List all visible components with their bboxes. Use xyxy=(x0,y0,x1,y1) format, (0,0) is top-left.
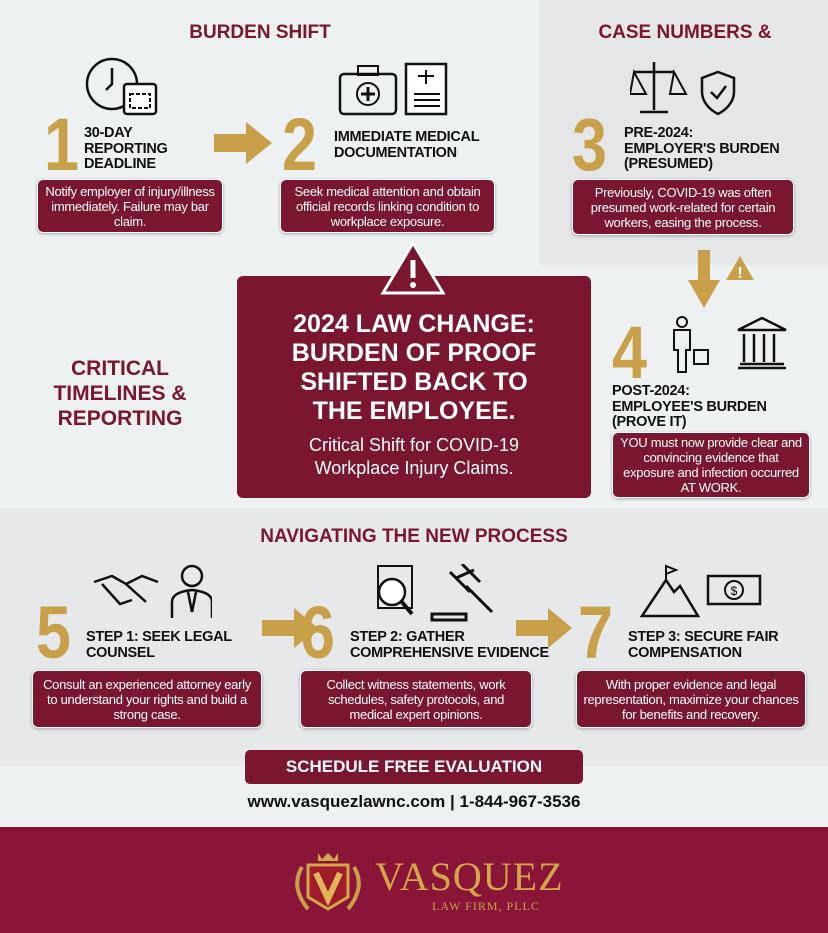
number 7: 7 xyxy=(578,591,613,674)
label 6 xyxy=(350,629,549,660)
callout subtitle xyxy=(309,435,519,478)
callout title xyxy=(292,310,536,425)
label 3: PRE-2024: xyxy=(624,125,693,141)
label 6: COMPREHENSIVE EVIDENCE xyxy=(350,644,549,660)
step 3 xyxy=(572,103,779,186)
number 4: 4 xyxy=(612,311,647,394)
text box 3 xyxy=(572,179,794,235)
step 6 xyxy=(300,591,549,674)
callout subtitle: Critical Shift for COVID-19 xyxy=(309,435,519,455)
step 2 xyxy=(282,103,480,186)
heading: navigating: NAVIGATING THE NEW PROCESS xyxy=(260,526,568,547)
heading: critical timelines: TIMELINES & xyxy=(53,382,186,405)
panel: top right background xyxy=(540,0,828,265)
label 1: 30-DAY xyxy=(84,125,132,141)
arrow 5 to 6 xyxy=(262,608,316,648)
label 1 xyxy=(84,125,168,172)
icon: handshake and lawyer xyxy=(94,564,212,618)
panel: bottom background xyxy=(0,508,828,766)
heading: critical timelines: CRITICAL xyxy=(71,357,169,380)
text box 7: With proper evidence and legal representation, maximize your chances for benefits and recovery. xyxy=(583,676,799,722)
number 2: 2 xyxy=(282,103,317,186)
label 2: IMMEDIATE MEDICAL xyxy=(334,129,479,145)
logo subtext: LAW FIRM, PLLC xyxy=(432,899,540,913)
icon: mountain flag and money: $ xyxy=(731,584,738,598)
label 2 xyxy=(334,129,480,160)
callout title: SHIFTED BACK TO xyxy=(300,368,528,396)
label 4: EMPLOYEE'S BURDEN xyxy=(612,398,767,414)
footer band xyxy=(0,827,828,933)
heading: case numbers: CASE NUMBERS & xyxy=(598,22,772,43)
text box 1: Notify employer of injury/illness immediately. Failure may bar claim. xyxy=(45,184,215,228)
callout title: THE EMPLOYEE. xyxy=(313,397,515,425)
text box 4: YOU must now provide clear and convincing evidence that exposure and infection occurred AT WORK. xyxy=(620,435,802,495)
logo text: VASQUEZ xyxy=(375,854,564,899)
label 4 xyxy=(612,383,767,430)
label 7: STEP 3: SECURE FAIR xyxy=(628,629,778,645)
arrow 1 to 2 xyxy=(214,122,272,164)
arrow down 3 to 4 xyxy=(688,250,754,308)
CTA button xyxy=(245,750,583,784)
number 3: 3 xyxy=(572,103,607,186)
icon: clock and calendar xyxy=(86,58,158,116)
label 5: COUNSEL xyxy=(86,644,155,660)
step 4 xyxy=(612,311,767,430)
label 7 xyxy=(628,629,778,660)
number 5: 5 xyxy=(36,591,71,674)
heading: critical timelines: REPORTING xyxy=(58,407,182,430)
callout title: 2024 LAW CHANGE: xyxy=(293,310,535,338)
text box 6: Collect witness statements, work schedules, safety protocols, and medical expert opinions. xyxy=(327,676,505,722)
label 3 xyxy=(624,125,779,172)
arrow 6 to 7 xyxy=(516,608,572,648)
label 5 xyxy=(86,629,232,660)
label 2: DOCUMENTATION xyxy=(334,144,457,160)
icon: medical kit and document xyxy=(338,62,448,116)
CTA button: SCHEDULE FREE EVALUATION xyxy=(286,757,542,776)
label 1: DEADLINE xyxy=(84,156,156,172)
icon: mountain flag and money xyxy=(640,564,762,618)
icon: scales and shield xyxy=(630,62,736,116)
number 6: 6 xyxy=(300,591,335,674)
label 3: (PRESUMED) xyxy=(624,156,713,172)
icon: magnifier and gavel xyxy=(377,564,493,622)
label 5: STEP 1: SEEK LEGAL xyxy=(86,629,232,645)
center callout xyxy=(237,276,591,498)
icon: person with bag and bank xyxy=(673,316,786,373)
text box 2: Seek medical attention and obtain official records linking condition to workplace exposure. xyxy=(295,184,480,228)
callout title: BURDEN OF PROOF xyxy=(292,339,536,367)
label 7: COMPENSATION xyxy=(628,644,742,660)
heading: critical timelines xyxy=(53,357,186,430)
contact line: www.vasquezlawnc.com | 1-844-967-3536 xyxy=(248,792,580,811)
callout subtitle: Workplace Injury Claims. xyxy=(315,458,513,478)
label 3: EMPLOYER'S BURDEN xyxy=(624,140,779,156)
warning icon xyxy=(380,240,446,294)
number 1: 1 xyxy=(44,103,79,186)
arrow down 3 to 4: ! xyxy=(737,265,743,282)
step 1 xyxy=(44,103,168,186)
step 7 xyxy=(578,591,778,674)
text box 5: Consult an experienced attorney early to understand your rights and build a strong case. xyxy=(43,676,251,722)
logo emblem xyxy=(295,853,361,911)
label 6: STEP 2: GATHER xyxy=(350,629,465,645)
heading: burden shift: BURDEN SHIFT xyxy=(189,22,331,43)
label 1: REPORTING xyxy=(84,140,168,156)
label 4: POST-2024: xyxy=(612,383,690,399)
label 4: (PROVE IT) xyxy=(612,414,686,430)
text box 6 xyxy=(300,670,532,728)
step 5 xyxy=(36,591,232,674)
text box 3: Previously, COVID-19 was often presumed work-related for certain workers, easing the process. xyxy=(591,184,775,230)
